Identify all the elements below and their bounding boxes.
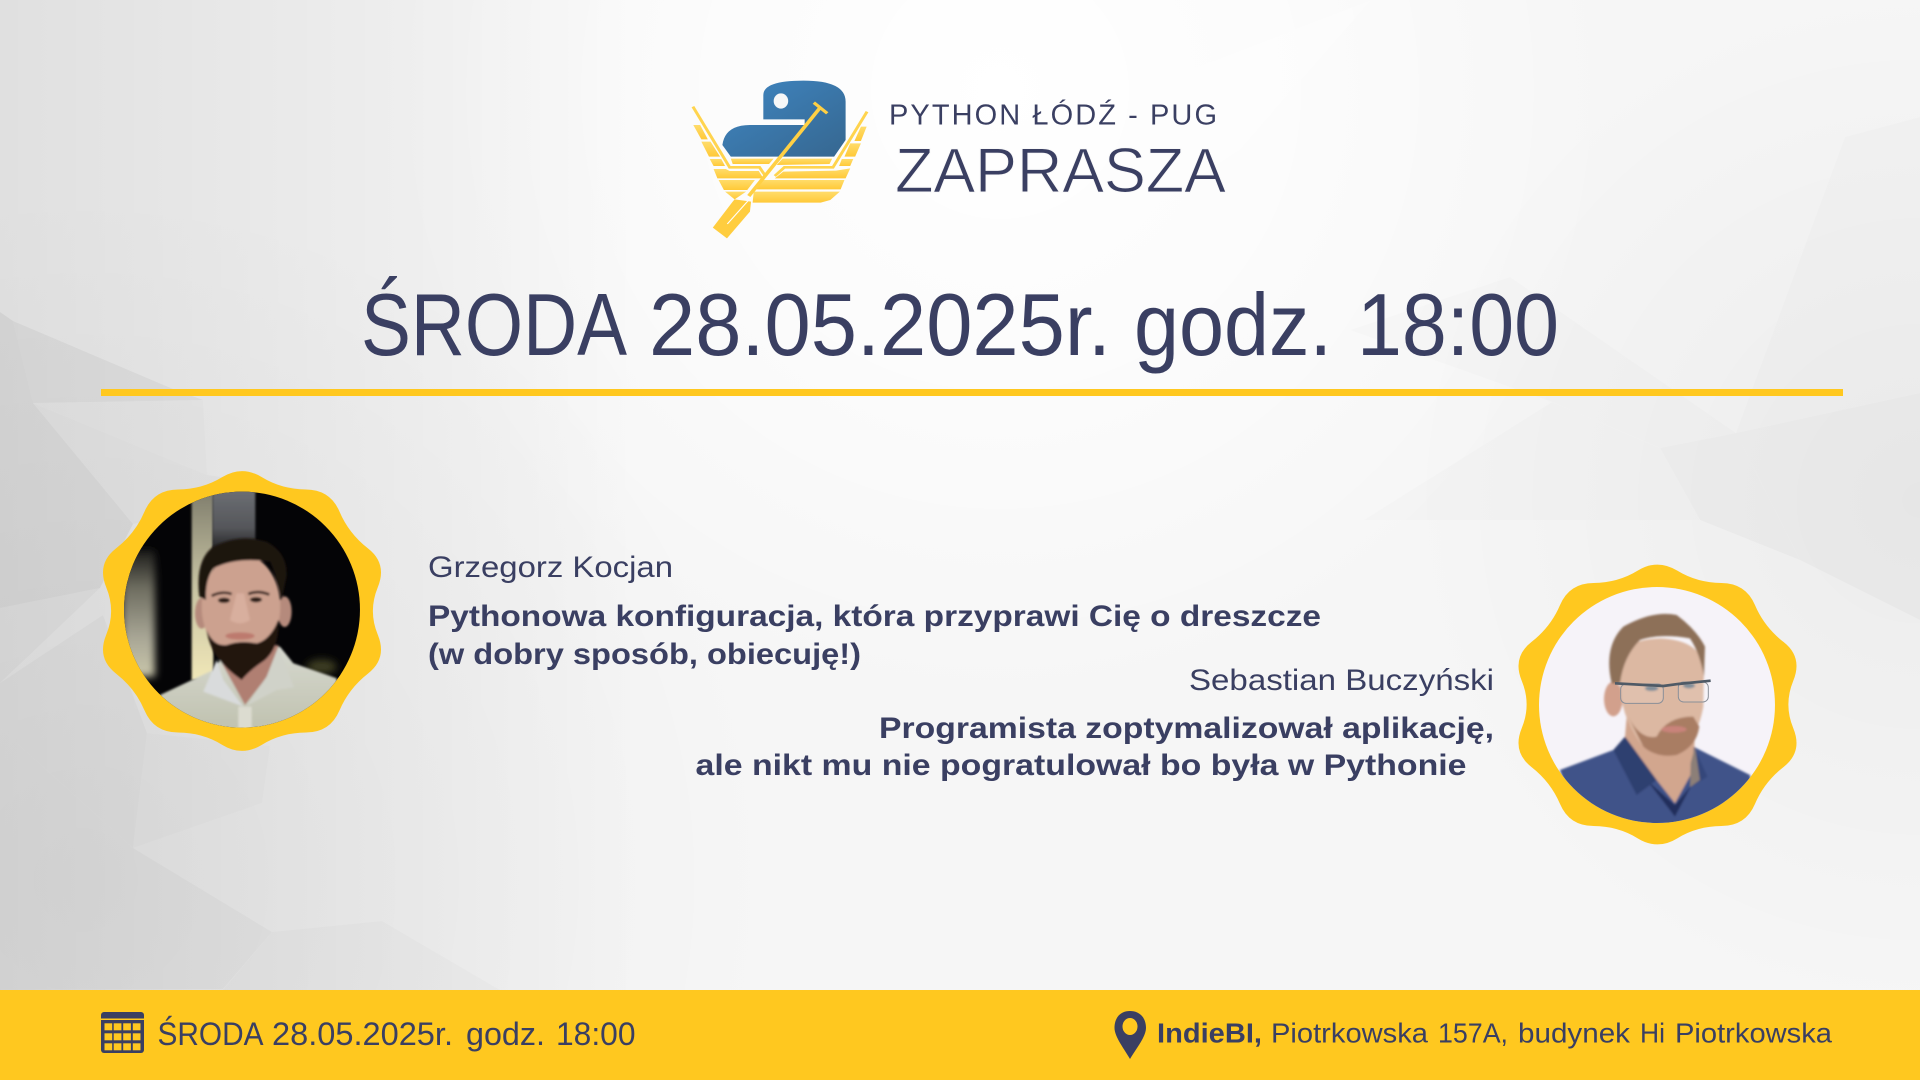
- speaker two badge with portrait: [1518, 565, 1797, 844]
- main date heading: 18:00: [1357, 275, 1559, 374]
- yellow divider: [101, 389, 1843, 396]
- heading: zaprasza: ZAPRASZA: [895, 136, 1226, 206]
- footer bar: [0, 990, 1920, 1080]
- talk title: Programista zoptymalizował aplikację,: [879, 712, 1494, 745]
- footer venue address: budynek: [1518, 1018, 1631, 1048]
- speaker name: Grzegorz Kocjan: [428, 551, 673, 584]
- footer date: godz.: [466, 1016, 545, 1052]
- footer venue address: Piotrkowska: [1271, 1018, 1428, 1048]
- footer date: ŚRODA: [158, 1016, 264, 1052]
- footer venue address: 157A,: [1438, 1018, 1508, 1048]
- footer date: 28.05.2025r.: [272, 1016, 453, 1052]
- footer venue address: Hi: [1640, 1018, 1665, 1048]
- talk title: ale nikt mu nie pogratulował bo była w Pythonie: [696, 749, 1466, 782]
- footer date: 18:00: [556, 1016, 636, 1052]
- speaker one badge with portrait: [103, 471, 381, 751]
- talk title: Pythonowa konfiguracja, która przyprawi Cię o dreszcze: [428, 600, 1321, 633]
- footer venue address: Piotrkowska: [1675, 1018, 1832, 1048]
- icon: calendar: [101, 1012, 144, 1053]
- footer venue address: IndieBI,: [1157, 1018, 1262, 1048]
- main date heading: 28.05.2025r.: [649, 275, 1111, 374]
- speaker name: Sebastian Buczyński: [1189, 664, 1494, 697]
- icon: map pin: [1114, 1011, 1146, 1059]
- portrait: Sebastian Buczyński: [1537, 585, 1780, 830]
- talk title: (w dobry sposób, obiecuję!): [428, 638, 861, 671]
- main date heading: ŚRODA: [361, 275, 627, 374]
- organiser name: PYTHON ŁÓDŹ - PUG: [889, 98, 1217, 132]
- speaker one text: [428, 551, 1321, 671]
- header: logo and organiser: [693, 81, 1226, 238]
- logo: Python snake and rowing boat: [693, 81, 867, 238]
- main date heading: godz.: [1134, 275, 1332, 374]
- portrait: Grzegorz Kocjan: [120, 487, 367, 733]
- speaker two text: [696, 664, 1494, 782]
